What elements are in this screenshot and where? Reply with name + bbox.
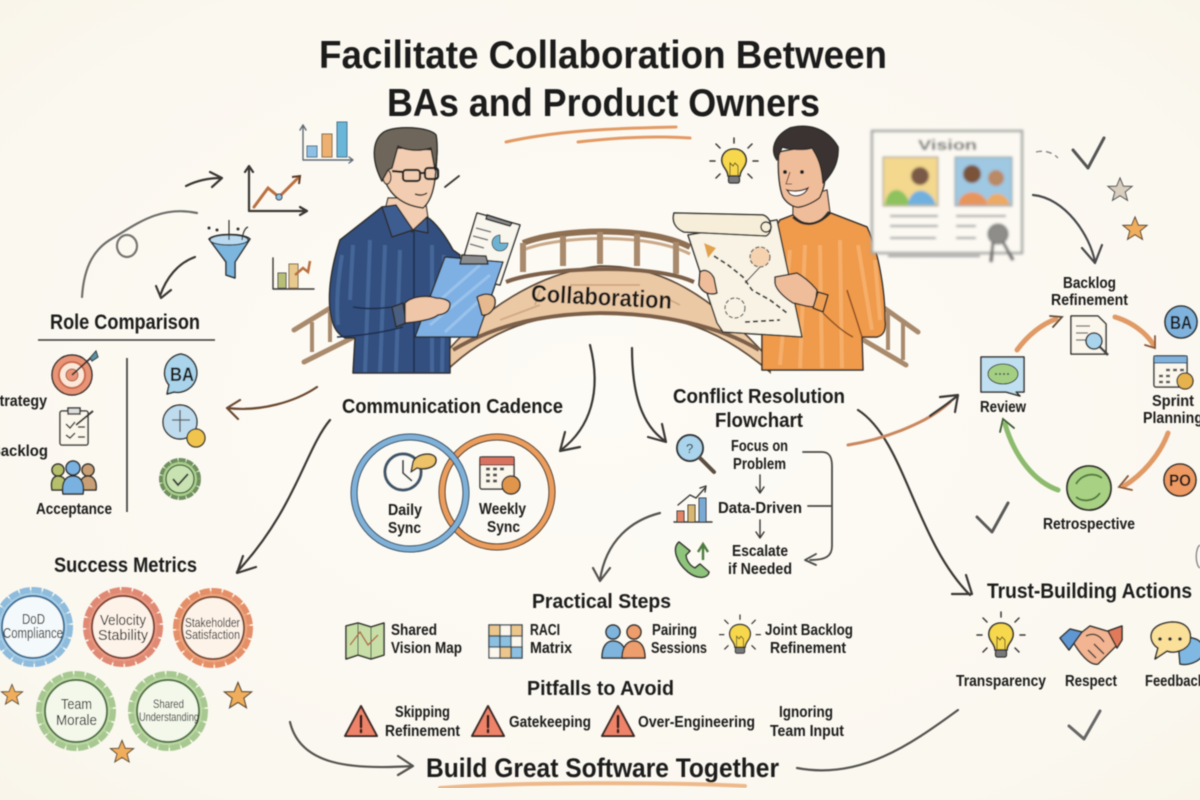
panel: conflict resolution: Flowchart bbox=[715, 410, 803, 432]
face bbox=[383, 148, 437, 208]
arrow: vision to backlog bbox=[1033, 195, 1102, 263]
sprint planning step: Sprint bbox=[1152, 393, 1195, 410]
shirt bbox=[329, 207, 460, 373]
panel: conflict resolution: Data-Driven bbox=[718, 500, 802, 517]
badge: velocity stability: Stability bbox=[98, 627, 148, 644]
figure: product owner bbox=[673, 126, 885, 370]
venn rings bbox=[442, 437, 552, 547]
labels: Transparency bbox=[956, 673, 1046, 690]
hands bbox=[405, 296, 450, 323]
bridge left rail bbox=[294, 296, 360, 362]
panel: practical steps: Sessions bbox=[651, 640, 707, 657]
panel: practical steps bbox=[346, 591, 853, 659]
badge: dod compliance: Compliance bbox=[3, 625, 63, 642]
map scroll bbox=[688, 220, 802, 337]
panel: conflict resolution: Escalate bbox=[732, 543, 788, 560]
arrow: to trust actions bbox=[858, 410, 972, 595]
panel: pitfalls: Gatekeeping bbox=[509, 714, 591, 731]
role badge PO: PO bbox=[1169, 471, 1191, 490]
arrow: to success metrics bbox=[237, 420, 330, 573]
panel: pitfalls: Team Input bbox=[770, 723, 845, 740]
icon: calendar bbox=[480, 457, 520, 494]
icon: idea bulb bbox=[710, 138, 758, 183]
panel: conflict resolution: Problem bbox=[733, 456, 786, 473]
stray stroke bbox=[445, 176, 459, 187]
arrow: to cadence bbox=[560, 345, 595, 451]
pitfall labels: Skipping bbox=[395, 704, 450, 721]
icon: scope bubble bbox=[163, 405, 205, 447]
bridge railing bbox=[523, 231, 690, 274]
hair bbox=[774, 126, 838, 183]
backlog refinement step bbox=[1051, 275, 1129, 355]
panel: delivery cycle bbox=[980, 275, 1200, 533]
retrospective step bbox=[1043, 466, 1135, 533]
icon: feedback bubbles bbox=[1151, 622, 1200, 664]
panel: pitfalls bbox=[345, 678, 845, 740]
title: Facilitate Collaboration Between bbox=[319, 34, 887, 77]
glasses bbox=[392, 168, 438, 181]
arrow: to practical steps bbox=[593, 513, 660, 581]
arrows: closing banner bbox=[290, 710, 958, 775]
heading: Pitfalls to Avoid bbox=[527, 678, 674, 700]
bridge label: Collaboration bbox=[530, 280, 673, 315]
backlog refinement step: Backlog bbox=[1063, 275, 1116, 292]
panel: practical steps: RACI bbox=[530, 622, 560, 639]
icon: bar trend bbox=[674, 486, 712, 522]
heading: Success Metrics bbox=[54, 554, 197, 577]
bracket bbox=[803, 452, 832, 565]
icon: BA bubble: BA bbox=[170, 365, 194, 386]
warning icons bbox=[345, 706, 377, 736]
badge: team morale: Team bbox=[61, 696, 92, 713]
icon: handshake bbox=[1060, 626, 1122, 664]
face bbox=[778, 145, 825, 207]
icon: magnifier: ? bbox=[686, 441, 693, 456]
stray circle edge bbox=[1196, 545, 1200, 568]
icon: BA bubble bbox=[165, 354, 197, 394]
heading: Role Comparison bbox=[50, 311, 200, 334]
panel: practical steps: Matrix bbox=[530, 640, 572, 657]
icon: bar chart top bbox=[300, 122, 353, 163]
panel: practical steps: Pairing bbox=[652, 622, 697, 639]
icon: funnel bbox=[208, 220, 250, 278]
icon: phone escalate bbox=[676, 542, 709, 577]
panel: success metrics bbox=[0, 554, 252, 762]
panel: pitfalls: Ignoring bbox=[779, 704, 833, 721]
arrow: to conflict bbox=[632, 348, 666, 442]
badge: stakeholder satisfaction: Satisfaction bbox=[185, 627, 240, 642]
badge: stakeholder satisfaction bbox=[176, 591, 250, 665]
badge: dod compliance: DoD bbox=[22, 611, 45, 628]
icon: raci matrix bbox=[489, 625, 522, 658]
check mark bbox=[977, 503, 1008, 532]
review step: Review bbox=[980, 399, 1026, 416]
icon: bulb bbox=[720, 615, 760, 653]
illustration: collaboration bridge bbox=[294, 126, 918, 373]
closing banner: Build Great Software Together bbox=[426, 753, 779, 783]
panel: practical steps: Refinement bbox=[770, 640, 847, 657]
role badge BA: BA bbox=[1170, 313, 1192, 333]
hair bbox=[374, 128, 437, 181]
heading: Conflict Resolution bbox=[673, 386, 845, 408]
retrospective step: Retrospective bbox=[1043, 516, 1135, 533]
hands bbox=[699, 270, 717, 294]
blue clipboard bbox=[415, 257, 503, 337]
panel: practical steps: Joint Backlog bbox=[765, 622, 853, 639]
review step bbox=[980, 357, 1026, 416]
icon: trend chart bbox=[245, 166, 307, 215]
icon: vision map bbox=[346, 623, 384, 659]
badge: dod compliance bbox=[0, 590, 70, 664]
icon: small growth chart bbox=[273, 258, 314, 289]
panel: conflict resolution: if Needed bbox=[728, 561, 792, 578]
title: BAs and Product Owners bbox=[387, 82, 820, 125]
bridge right rail bbox=[860, 298, 918, 365]
arrow: to cycle bbox=[848, 395, 958, 445]
sprint planning step bbox=[1143, 356, 1200, 427]
vision document (blurred): Vision bbox=[918, 137, 977, 154]
bridge deck bbox=[440, 266, 770, 372]
badge: shared understanding: Shared bbox=[153, 697, 184, 711]
sweater bbox=[762, 212, 885, 370]
vision document (blurred) bbox=[872, 131, 1022, 262]
icon: transparency bulb bbox=[977, 612, 1025, 657]
white clipboard bbox=[458, 213, 520, 285]
icon: people bbox=[51, 461, 96, 494]
arrow: to role comparison bbox=[227, 387, 317, 419]
badge: team morale bbox=[39, 674, 113, 748]
badge: shared understanding bbox=[131, 674, 205, 748]
badge: team morale: Morale bbox=[56, 712, 97, 729]
panel: role comparison: Acceptance bbox=[36, 501, 112, 518]
panel: trust-building actions bbox=[956, 580, 1200, 690]
title bbox=[319, 34, 887, 125]
panel: communication cadence: Weekly bbox=[479, 501, 526, 518]
icon: magnifier bbox=[677, 435, 714, 472]
decorations: top right bbox=[1036, 138, 1147, 239]
icon: pairing people bbox=[602, 625, 645, 658]
heading: Communication Cadence bbox=[342, 396, 563, 418]
icon: checklist bbox=[60, 408, 93, 445]
panel: conflict resolution bbox=[673, 386, 845, 578]
neck bbox=[384, 198, 428, 234]
labels: Daily bbox=[388, 502, 422, 519]
role badge BA bbox=[1165, 306, 1197, 338]
stars bbox=[2, 682, 252, 762]
icon: target bbox=[52, 351, 98, 395]
badge: velocity stability bbox=[86, 590, 160, 664]
icon: clock bbox=[385, 454, 436, 490]
heading: Practical Steps bbox=[532, 591, 671, 613]
check mark bbox=[1069, 711, 1100, 739]
panel: practical steps: Vision Map bbox=[391, 640, 462, 657]
icon: acceptance badge bbox=[161, 460, 199, 498]
panel: practical steps: Shared bbox=[391, 622, 437, 639]
panel: pitfalls: Refinement bbox=[385, 723, 461, 740]
title underline strokes bbox=[506, 127, 690, 142]
panel: trust-building actions: Respect bbox=[1065, 673, 1118, 690]
backlog refinement step: Refinement bbox=[1051, 292, 1129, 309]
panel: communication cadence bbox=[342, 396, 563, 549]
neck bbox=[793, 190, 830, 224]
arrows: top left sketch bbox=[82, 172, 222, 298]
panel: role comparison bbox=[0, 311, 215, 518]
panel: communication cadence: Sync bbox=[487, 519, 520, 536]
badge: velocity stability: Velocity bbox=[100, 612, 146, 629]
panel: communication cadence: Sync bbox=[388, 520, 421, 537]
panel: pitfalls: Over-Engineering bbox=[638, 714, 755, 731]
step text: Focus on bbox=[731, 438, 788, 455]
cycle arrows bbox=[1000, 316, 1168, 490]
role badge PO bbox=[1164, 464, 1196, 496]
figure: business analyst bbox=[329, 128, 520, 373]
badge: shared understanding: Understanding bbox=[139, 710, 199, 724]
badge: stakeholder satisfaction: Stakeholder bbox=[185, 615, 241, 630]
